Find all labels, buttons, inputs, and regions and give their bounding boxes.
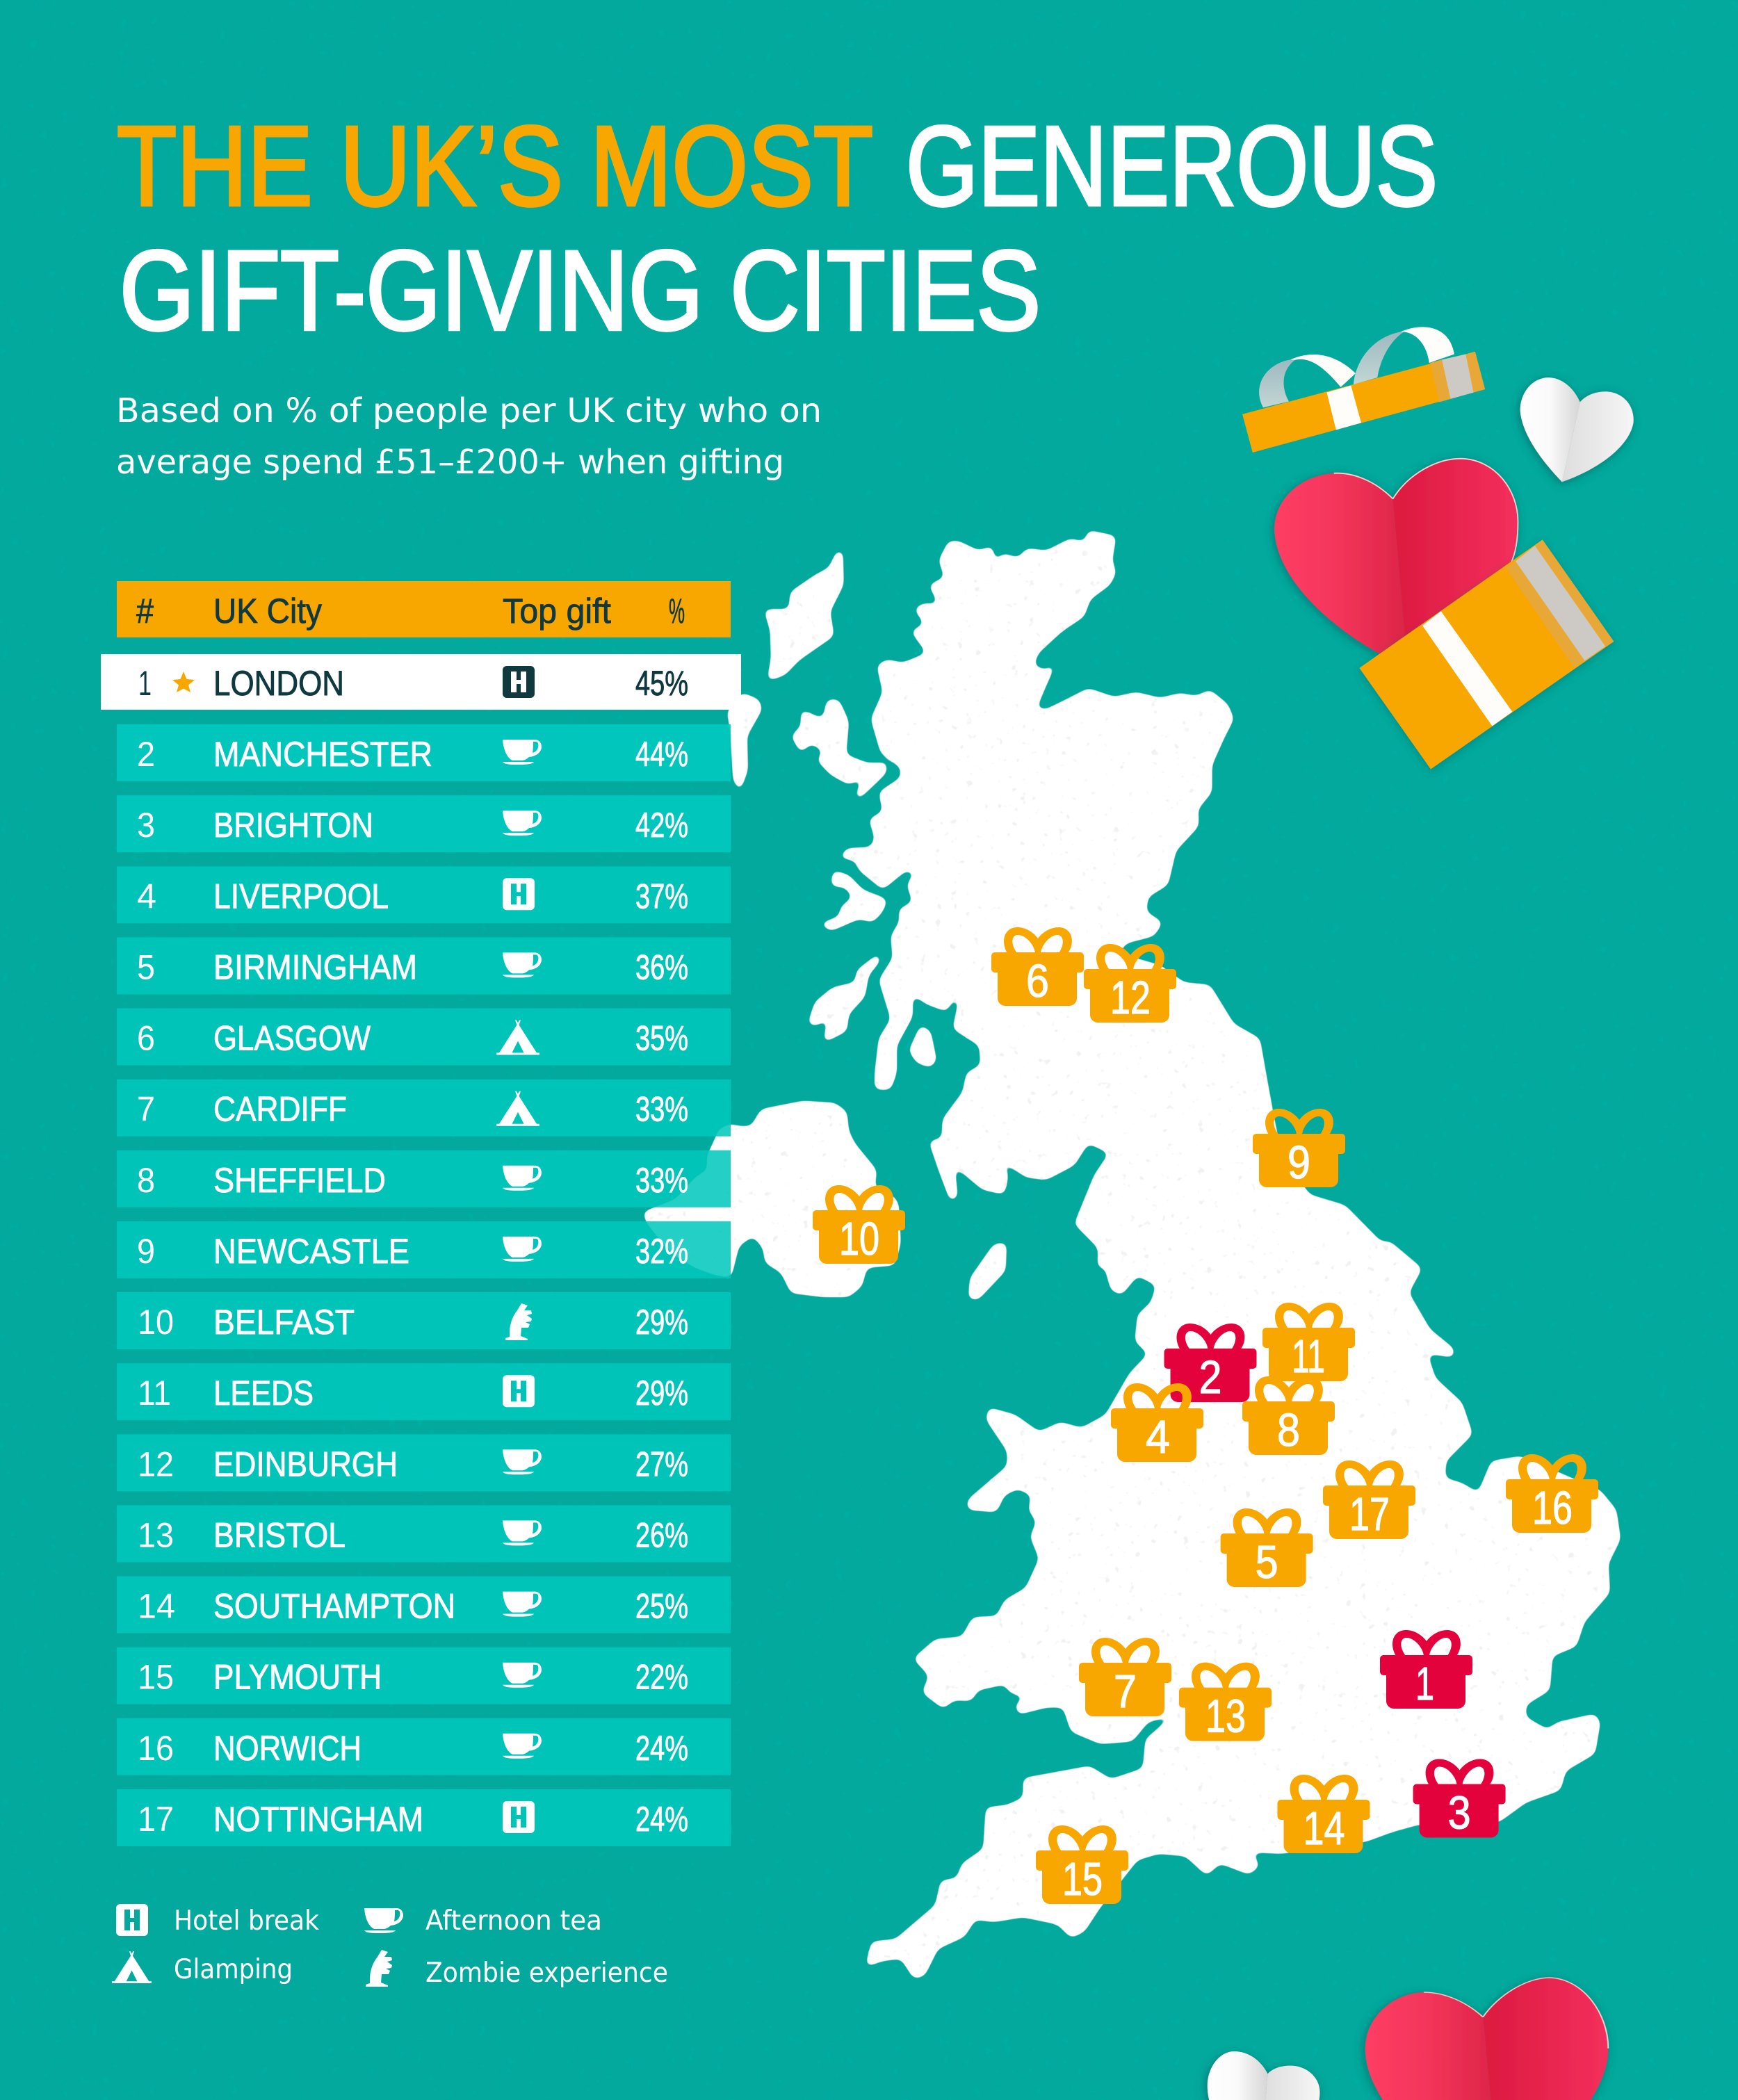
marker 12 Edinburgh: 12 xyxy=(1110,972,1151,1024)
marker 9 Newcastle: 9 xyxy=(1288,1137,1310,1189)
legend: zombie experience: Zombie experience xyxy=(425,1957,668,1989)
title: GENEROUS xyxy=(906,102,1438,229)
row 15 Plymouth: PLYMOUTH xyxy=(213,1658,382,1697)
subtitle: Based on % of people per UK city who on xyxy=(116,391,822,430)
marker 15 Plymouth xyxy=(1036,1825,1128,1905)
row 17 Nottingham: NOTTINGHAM xyxy=(213,1800,423,1839)
row 3 Brighton: BRIGHTON xyxy=(213,806,373,845)
row 8 Sheffield: 8 xyxy=(137,1161,155,1200)
row 10 Belfast: BELFAST xyxy=(213,1303,355,1342)
row 1 London xyxy=(101,654,741,710)
row 5 Birmingham: 36% xyxy=(635,947,688,986)
subtitle xyxy=(116,391,822,482)
marker 1 London xyxy=(1380,1630,1472,1710)
table header: Top gift xyxy=(503,592,611,630)
marker 7 Cardiff xyxy=(1079,1638,1171,1718)
row 14 Southampton: 14 xyxy=(138,1587,175,1626)
row 2 Manchester: 2 xyxy=(137,735,155,774)
subtitle: average spend £51–£200+ when gifting xyxy=(116,443,784,482)
legend: hotel break: Hotel break xyxy=(174,1905,319,1937)
marker 2 Manchester xyxy=(1164,1324,1257,1403)
white heart xyxy=(1520,377,1634,482)
row 13 Bristol: 13 xyxy=(138,1515,174,1554)
table header: # xyxy=(136,592,154,630)
marker 7 Cardiff: 7 xyxy=(1114,1666,1137,1718)
legend: glamping xyxy=(112,1951,293,1985)
marker 9 Newcastle xyxy=(1253,1109,1345,1189)
marker 8 Sheffield xyxy=(1242,1376,1335,1456)
marker 2 Manchester: 2 xyxy=(1199,1351,1222,1403)
row 15 Plymouth: 15 xyxy=(138,1658,174,1697)
row 11 Leeds xyxy=(117,1363,731,1420)
row 11 Leeds: LEEDS xyxy=(213,1374,314,1413)
row 17 Nottingham: 24% xyxy=(635,1800,688,1839)
row 2 Manchester xyxy=(117,724,731,781)
marker 12 Edinburgh xyxy=(1084,944,1176,1024)
marker 10 Belfast: 10 xyxy=(839,1213,879,1265)
legend: hotel break xyxy=(116,1904,319,1937)
row 11 Leeds: 11 xyxy=(138,1374,171,1413)
row 8 Sheffield xyxy=(117,1150,731,1207)
marker 11 Leeds xyxy=(1262,1303,1355,1383)
illustration: open gift box with hearts xyxy=(1242,327,1634,770)
marker 3 Brighton xyxy=(1413,1759,1506,1839)
large red heart xyxy=(1365,1978,1608,2100)
marker 5 Birmingham xyxy=(1221,1508,1313,1588)
row 4 Liverpool: 4 xyxy=(137,877,156,915)
row 6 Glasgow: 6 xyxy=(137,1019,155,1058)
title xyxy=(117,102,1438,354)
row 9 Newcastle: 9 xyxy=(137,1232,155,1271)
marker 16 Norwich: 16 xyxy=(1532,1482,1573,1534)
row 5 Birmingham xyxy=(117,937,731,994)
legend: glamping: Glamping xyxy=(174,1954,293,1985)
row 7 Cardiff: 7 xyxy=(137,1090,155,1129)
row 12 Edinburgh: 27% xyxy=(635,1444,688,1483)
row 9 Newcastle: NEWCASTLE xyxy=(213,1232,409,1271)
row 1 London: 1 xyxy=(138,664,152,703)
title: THE UK’S MOST xyxy=(117,102,873,229)
marker 5 Birmingham: 5 xyxy=(1256,1536,1278,1588)
marker 6 Glasgow xyxy=(991,927,1084,1007)
marker 4 Liverpool: 4 xyxy=(1146,1411,1170,1463)
row 4 Liverpool xyxy=(117,866,731,923)
marker 4 Liverpool xyxy=(1111,1383,1203,1463)
map gift markers xyxy=(813,927,1598,1905)
row 17 Nottingham: 17 xyxy=(138,1800,174,1839)
row 16 Norwich xyxy=(117,1718,731,1775)
marker 17 Nottingham: 17 xyxy=(1349,1488,1390,1540)
marker 13 Bristol: 13 xyxy=(1205,1691,1246,1743)
row 4 Liverpool: LIVERPOOL xyxy=(213,877,389,915)
row 3 Brighton: 3 xyxy=(137,806,155,845)
row 7 Cardiff: CARDIFF xyxy=(213,1090,347,1129)
gift box base xyxy=(1359,539,1614,770)
row 6 Glasgow: GLASGOW xyxy=(213,1019,371,1058)
row 10 Belfast xyxy=(117,1292,731,1349)
marker 14 Southampton xyxy=(1278,1775,1370,1855)
row 1 London: LONDON xyxy=(213,664,344,703)
row 16 Norwich: 16 xyxy=(138,1729,174,1768)
row 15 Plymouth xyxy=(117,1647,731,1704)
marker 15 Plymouth: 15 xyxy=(1062,1853,1103,1905)
marker 14 Southampton: 14 xyxy=(1303,1802,1345,1855)
row 8 Sheffield: 33% xyxy=(635,1161,688,1200)
row 14 Southampton xyxy=(117,1577,731,1634)
marker 16 Norwich xyxy=(1506,1454,1598,1534)
row 2 Manchester: 44% xyxy=(635,735,688,774)
row 6 Glasgow: 35% xyxy=(635,1019,688,1058)
marker 13 Bristol xyxy=(1179,1663,1272,1743)
row 12 Edinburgh: EDINBURGH xyxy=(213,1444,398,1483)
box lid with ribbon xyxy=(1242,327,1485,453)
row 2 Manchester: MANCHESTER xyxy=(213,735,432,774)
row 13 Bristol xyxy=(117,1505,731,1562)
marker 10 Belfast xyxy=(813,1185,905,1265)
row 4 Liverpool: 37% xyxy=(635,877,688,915)
row 8 Sheffield: SHEFFIELD xyxy=(213,1161,386,1200)
illustration: bottom hearts xyxy=(1208,1978,1608,2100)
map of the UK xyxy=(642,530,1621,1979)
row 10 Belfast: 29% xyxy=(635,1303,688,1342)
marker 8 Sheffield: 8 xyxy=(1277,1404,1300,1456)
title: GIFT-GIVING CITIES xyxy=(120,227,1041,354)
row 1 London: 45% xyxy=(635,664,688,703)
table header: % xyxy=(669,592,685,630)
table header xyxy=(117,581,731,637)
row 14 Southampton: 25% xyxy=(635,1587,688,1626)
row 5 Birmingham: 5 xyxy=(137,947,155,986)
row 3 Brighton xyxy=(117,795,731,852)
marker 11 Leeds: 11 xyxy=(1292,1330,1325,1383)
marker 1 London: 1 xyxy=(1415,1658,1434,1710)
marker 6 Glasgow: 6 xyxy=(1026,955,1049,1007)
row 9 Newcastle: 32% xyxy=(635,1232,688,1271)
ranking table xyxy=(101,581,741,1846)
row 15 Plymouth: 22% xyxy=(635,1658,688,1697)
row 12 Edinburgh: 12 xyxy=(138,1444,174,1483)
row 10 Belfast: 10 xyxy=(138,1303,174,1342)
marker 3 Brighton: 3 xyxy=(1448,1786,1471,1839)
row 14 Southampton: SOUTHAMPTON xyxy=(213,1587,455,1626)
row 16 Norwich: 24% xyxy=(635,1729,688,1768)
small white heart xyxy=(1208,2051,1319,2100)
row 13 Bristol: BRISTOL xyxy=(213,1515,346,1554)
row 7 Cardiff xyxy=(117,1080,731,1137)
row 11 Leeds: 29% xyxy=(635,1374,688,1413)
marker 17 Nottingham xyxy=(1323,1460,1415,1540)
red heart xyxy=(1274,459,1518,654)
row 17 Nottingham xyxy=(117,1789,731,1846)
legend: afternoon tea: Afternoon tea xyxy=(425,1905,602,1937)
row 3 Brighton: 42% xyxy=(635,806,688,845)
row 13 Bristol: 26% xyxy=(635,1515,688,1554)
row 16 Norwich: NORWICH xyxy=(213,1729,362,1768)
legend xyxy=(112,1904,668,1989)
table header: UK City xyxy=(213,592,322,630)
row 9 Newcastle xyxy=(117,1221,731,1278)
row 6 Glasgow xyxy=(117,1008,731,1065)
row 5 Birmingham: BIRMINGHAM xyxy=(213,947,417,986)
row 7 Cardiff: 33% xyxy=(635,1090,688,1129)
row 12 Edinburgh xyxy=(117,1434,731,1491)
legend: zombie experience xyxy=(366,1950,668,1989)
